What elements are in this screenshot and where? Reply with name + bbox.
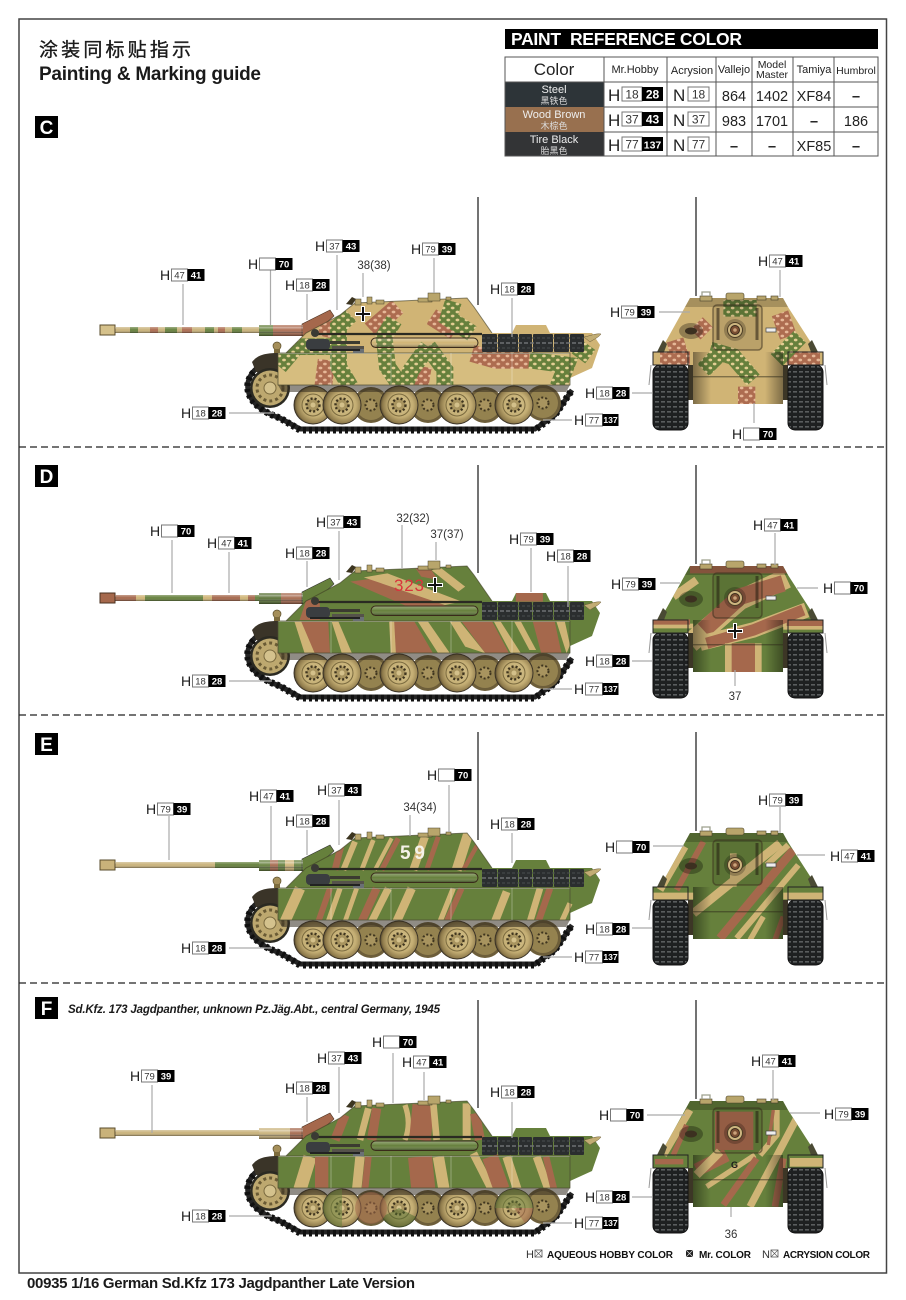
paint reference table: N xyxy=(673,136,685,155)
side view E xyxy=(100,732,605,965)
callout: H 47 41: H xyxy=(160,267,170,283)
callout: H 70: 70 xyxy=(403,1038,413,1048)
callout: H 79 39: 79 xyxy=(160,804,171,816)
callout: H 18 28 wheel: 28 xyxy=(212,944,222,954)
callout: front H 70 xyxy=(732,426,776,442)
callout: H 37 43 xyxy=(316,514,360,530)
paint reference table: 77 xyxy=(692,138,705,152)
legend: Mr. COLOR xyxy=(699,1250,752,1261)
callout: front H 70: 70 xyxy=(854,584,864,594)
paint reference heading xyxy=(505,29,878,49)
callout: front H 47 41 xyxy=(758,253,802,269)
callout: H 18 28 xyxy=(285,545,330,561)
paint reference table: – xyxy=(810,114,818,130)
callout: H 79 39: H xyxy=(146,801,156,817)
callout: H 79 39: 39 xyxy=(442,244,452,256)
callout: H 79 39 xyxy=(411,241,456,257)
side view F xyxy=(100,1000,605,1233)
callout: H 79 39 xyxy=(509,531,554,547)
callout: H 18 28 rear xyxy=(490,281,534,297)
title: chinese: 涂装同标贴指示 xyxy=(39,39,191,61)
callout: H 47 41 xyxy=(207,535,252,551)
callout: H 37 43: H xyxy=(315,238,325,254)
callout: H 18 28 wheel: 28 xyxy=(212,408,222,420)
callout: front H 79 39: 39 xyxy=(642,580,652,590)
callout: H 18 28 xyxy=(285,277,330,293)
callout: H 70 xyxy=(372,1034,416,1050)
paint reference table: Steel xyxy=(541,84,567,96)
front view C xyxy=(649,197,827,430)
callout: H 70: 70 xyxy=(279,260,289,270)
callout: front H 79 39: 79 xyxy=(625,580,636,590)
callout: H 47 41 xyxy=(249,788,294,804)
callout: front H 47 41: H xyxy=(830,848,840,864)
callout: H 77 137: 137 xyxy=(603,1218,618,1228)
callout: H 79 39: H xyxy=(411,241,421,257)
badge D xyxy=(35,465,58,488)
callout: 34(34): 34(34) xyxy=(403,802,437,814)
callout: front H 70: 70 xyxy=(636,842,646,854)
callout: H 79 39 xyxy=(146,801,190,817)
paint reference table: – xyxy=(852,139,860,155)
callout: H 77 137: 137 xyxy=(603,952,618,962)
callout: H 37 43: 37 xyxy=(331,1054,342,1064)
callout: front H 18 28: 28 xyxy=(616,1192,626,1204)
paint reference table: H xyxy=(608,136,620,155)
paint reference table xyxy=(505,57,878,156)
callout: H 77 137 xyxy=(574,1215,618,1231)
paint reference table: 1701 xyxy=(756,114,788,130)
title: english: Painting & Marking guide xyxy=(39,64,261,85)
callout: H 18 28 rear: 28 xyxy=(577,552,587,562)
callout: H 18 28 wheel: H xyxy=(181,405,191,421)
badge F: F xyxy=(41,999,52,1020)
callout: H 18 28 rear: 18 xyxy=(560,552,571,562)
paint reference table: 43 xyxy=(646,112,659,126)
callout: front H 70 xyxy=(599,1107,644,1123)
callout: H 77 137: H xyxy=(574,949,584,965)
callout: H 18 28 rear: 18 xyxy=(504,820,515,830)
callout: front H 18 28 xyxy=(585,1189,630,1205)
callout: H 47 41: 47 xyxy=(221,538,232,550)
callout: H 47 41: H xyxy=(249,788,259,804)
leader lines F xyxy=(152,1053,820,1223)
callout: H 18 28 rear: H xyxy=(490,281,500,297)
callout: front H 79 39 xyxy=(611,576,656,592)
paint reference table: Master xyxy=(756,69,789,81)
callout: H 70: 70 xyxy=(458,770,468,782)
callout: H 18 28 rear: 18 xyxy=(504,1088,515,1098)
callout: H 79 39: 79 xyxy=(523,534,534,546)
callout: H 37 43: 37 xyxy=(329,242,340,252)
callout: H 77 137 xyxy=(574,681,618,697)
callout: H 18 28 wheel: H xyxy=(181,940,191,956)
callout: front H 79 39: 79 xyxy=(624,308,635,318)
panel: scheme E xyxy=(35,732,874,965)
paint reference table: Color xyxy=(534,60,575,79)
callout: H 18 28 wheel: 18 xyxy=(195,408,206,420)
callout: H 18 28: H xyxy=(285,1080,295,1096)
callout: front H 18 28: 18 xyxy=(599,388,610,400)
front view F xyxy=(649,1000,827,1233)
callout: H 18 28: 28 xyxy=(316,1084,326,1094)
callout: H 79 39 xyxy=(130,1068,174,1084)
callout: front H 79 39 xyxy=(758,792,802,808)
marking: number 59: 59 xyxy=(400,843,425,864)
callout: H 18 28: 18 xyxy=(299,1084,310,1094)
callout: H 18 28 rear xyxy=(490,1084,534,1100)
callout: H 79 39: H xyxy=(130,1068,140,1084)
callout: H 37 43: 37 xyxy=(330,518,341,528)
callout: H 18 28 xyxy=(285,1080,330,1096)
legend: H xyxy=(526,1249,534,1261)
paint reference heading: PAINT REFERENCE COLOR xyxy=(511,29,742,49)
callout: H 77 137 xyxy=(574,949,618,965)
callout: front H 18 28: 18 xyxy=(599,656,610,668)
panel: scheme D xyxy=(35,465,868,703)
side view D xyxy=(100,465,605,698)
callout: H 79 39: 39 xyxy=(177,804,187,816)
legend: ACRYSION COLOR xyxy=(783,1250,871,1261)
legend xyxy=(526,1249,871,1261)
callout: H 18 28 rear xyxy=(490,816,534,832)
callout: H 18 28 rear: 28 xyxy=(521,1088,531,1098)
callout: H 47 41: H xyxy=(402,1054,412,1070)
callout: front H 79 39: 39 xyxy=(641,308,651,318)
side view C xyxy=(100,197,605,430)
callout: front H 79 39: H xyxy=(758,792,768,808)
badge C xyxy=(35,116,58,139)
callout: front H 79 39: 39 xyxy=(789,796,799,806)
callout: front H 79 39: H xyxy=(824,1106,834,1122)
paint reference table: Wood Brown xyxy=(523,109,585,121)
callout: H 47 41 xyxy=(160,267,204,283)
paint reference table: 186 xyxy=(844,114,868,130)
badge F xyxy=(35,997,58,1020)
callout: H 37 43: 43 xyxy=(347,518,357,528)
callout: front H 18 28: 28 xyxy=(616,656,626,668)
callout: front H 70 xyxy=(823,580,868,596)
leader lines C xyxy=(183,255,780,423)
callout: 37(37): 37(37) xyxy=(430,529,464,541)
paint reference table: – xyxy=(730,139,738,155)
callout: 32(32): 32(32) xyxy=(396,513,430,525)
callout: H 18 28: 18 xyxy=(299,816,310,828)
callout: H 18 28 rear: H xyxy=(490,816,500,832)
callout: front H 18 28: H xyxy=(585,921,595,937)
callout: H 18 28 wheel xyxy=(181,405,226,421)
callout: front H 70: H xyxy=(599,1107,609,1123)
callout: H 18 28: 28 xyxy=(316,548,326,560)
callout: H 79 39: 39 xyxy=(161,1072,171,1082)
callout: H 18 28 rear: H xyxy=(490,1084,500,1100)
marking: number 323: 323 xyxy=(394,576,424,595)
paint reference table: 137 xyxy=(644,139,661,151)
callout: H 47 41: 47 xyxy=(416,1058,427,1068)
callout: H 70 xyxy=(248,256,292,272)
callout: H 18 28: H xyxy=(285,277,295,293)
callout: H 18 28: 28 xyxy=(316,280,326,292)
front view E xyxy=(649,732,827,965)
callout: front H 79 39 xyxy=(824,1106,868,1122)
paint reference table: 983 xyxy=(722,114,746,130)
callout: H 70: H xyxy=(150,523,160,539)
paint reference table: N xyxy=(673,86,685,105)
callout: H 70: H xyxy=(427,767,437,783)
callout: H 18 28 wheel: 18 xyxy=(195,944,206,954)
callout: H 18 28: 18 xyxy=(299,548,310,560)
paint reference table: – xyxy=(852,89,860,105)
callout: H 77 137: 137 xyxy=(603,415,618,425)
paint reference table: 77 xyxy=(625,138,639,152)
callout: H 18 28: H xyxy=(285,813,295,829)
callout: front H 18 28 xyxy=(585,385,630,401)
callout: H 77 137: 77 xyxy=(589,1218,599,1230)
callout: H 79 39: 79 xyxy=(425,244,436,256)
callout: H 18 28 wheel: H xyxy=(181,1208,191,1224)
panel: scheme C xyxy=(35,116,827,442)
paint reference table: N xyxy=(673,111,685,130)
callout: H 77 137: 77 xyxy=(589,952,599,964)
callout: front H 47 41 xyxy=(751,1053,796,1069)
callout: H 47 41: 47 xyxy=(263,792,274,802)
paint reference table: Vallejo xyxy=(718,64,750,76)
callout: H 37 43 xyxy=(317,1050,362,1066)
legend: N xyxy=(762,1249,770,1261)
section dividers xyxy=(19,447,886,983)
callout: front H 79 39: H xyxy=(611,576,621,592)
legend: AQUEOUS HOBBY COLOR xyxy=(547,1250,674,1261)
paint reference table: 1402 xyxy=(756,89,788,105)
paint reference table: XF84 xyxy=(797,89,831,105)
callout: 38(38): 38(38) xyxy=(357,260,391,272)
callout: H 77 137 xyxy=(574,412,618,428)
callout: H 70 xyxy=(427,767,472,783)
paint reference table: 37 xyxy=(692,112,705,126)
callout: H 79 39: H xyxy=(509,531,519,547)
callout: front H 18 28: H xyxy=(585,385,595,401)
callout: H 77 137: H xyxy=(574,412,584,428)
paint reference table: 18 xyxy=(625,88,639,102)
scheme F caption: Sd.Kfz. 173 Jagdpanther, unknown Pz.Jäg.Abt., central Germany, 1945 xyxy=(68,1004,441,1016)
callout: H 18 28 wheel: 28 xyxy=(212,1212,222,1222)
callout: H 18 28 wheel: H xyxy=(181,673,191,689)
callout: front H 18 28: H xyxy=(585,1189,595,1205)
callout: H 18 28 wheel xyxy=(181,1208,226,1224)
callout: H 18 28 rear: 18 xyxy=(504,284,515,296)
callout: H 70: H xyxy=(372,1034,382,1050)
paint reference table: 28 xyxy=(646,88,659,102)
callout: front H 47 41: 47 xyxy=(765,1056,776,1068)
callout: H 77 137: H xyxy=(574,1215,584,1231)
paint reference table: Mr.Hobby xyxy=(611,64,659,76)
paint reference table: 864 xyxy=(722,89,746,105)
callout: front H 79 39: H xyxy=(610,304,620,320)
callout: front H 47 41: H xyxy=(751,1053,761,1069)
marking: front balkenkreuz xyxy=(727,623,743,639)
paint reference table: – xyxy=(768,139,776,155)
paint reference table: XF85 xyxy=(797,139,831,155)
callout: H 18 28 rear xyxy=(546,548,590,564)
paint reference table: 胎黑色 xyxy=(540,145,568,156)
callout: 36: 36 xyxy=(725,1229,737,1241)
callout: H 37 43: 37 xyxy=(331,786,342,796)
callout: H 70: H xyxy=(248,256,258,272)
callout: front H 47 41: 47 xyxy=(772,256,783,268)
paint reference table: H xyxy=(608,111,620,130)
callout: front H 79 39: 39 xyxy=(855,1110,865,1120)
callout: H 37 43: 43 xyxy=(348,1054,358,1064)
callout: front H 18 28: 28 xyxy=(616,924,626,936)
callout: H 37 43: 43 xyxy=(348,786,358,796)
paint reference table: Tire Black xyxy=(530,134,579,146)
callout: front H 47 41: H xyxy=(758,253,768,269)
paint reference table: 37 xyxy=(625,112,639,126)
callout: front H 18 28 xyxy=(585,653,630,669)
badge E xyxy=(35,733,58,756)
callout: front H 70: H xyxy=(605,839,615,855)
callout: front H 18 28: 18 xyxy=(599,924,610,936)
callout: front H 47 41: 47 xyxy=(844,852,855,862)
callout: front H 47 41: 47 xyxy=(767,520,778,532)
callout: front H 18 28: H xyxy=(585,653,595,669)
callout: front H 47 41: 41 xyxy=(861,852,872,862)
callout: front H 47 41 xyxy=(753,517,798,533)
callout: front H 47 41 xyxy=(830,848,874,864)
marking: front G: G xyxy=(731,1160,738,1170)
callout: front H 18 28: 18 xyxy=(599,1192,610,1204)
callout: front H 70: 70 xyxy=(630,1110,640,1122)
callout: H 77 137: H xyxy=(574,681,584,697)
paint reference table: 木棕色 xyxy=(540,120,568,131)
callout: H 77 137: 137 xyxy=(603,684,618,694)
leader lines E xyxy=(169,785,825,957)
marking: balkenkreuz xyxy=(355,306,371,322)
callout: front H 47 41: 41 xyxy=(784,520,795,532)
footer product title: 00935 1/16 German Sd.Kfz 173 Jagdpanther Late Version xyxy=(27,1275,415,1292)
callout: H 47 41: 41 xyxy=(238,538,249,550)
callout: H 47 41 xyxy=(402,1054,446,1070)
marking: balkenkreuz xyxy=(427,577,443,593)
callout: H 18 28 rear: H xyxy=(546,548,556,564)
callout: front H 70: H xyxy=(823,580,833,596)
callout: H 47 41: 47 xyxy=(174,270,185,282)
callout: front H 47 41: H xyxy=(753,517,763,533)
callout: front H 70: 70 xyxy=(763,430,773,440)
callout: front H 18 28 xyxy=(585,921,630,937)
paint reference table: Model xyxy=(758,59,786,71)
badge E: E xyxy=(40,735,53,756)
callout: H 18 28 wheel xyxy=(181,673,226,689)
paint reference table: Tamiya xyxy=(797,64,832,76)
callout: H 37 43: H xyxy=(317,1050,327,1066)
callout: H 18 28 rear: 28 xyxy=(521,284,531,296)
paint reference table: 黑铁色 xyxy=(540,95,568,106)
callout: front H 47 41: 41 xyxy=(789,256,800,268)
callout: H 18 28 rear: 28 xyxy=(521,820,531,830)
panel: scheme F xyxy=(35,997,868,1241)
callout: H 18 28: 18 xyxy=(299,280,310,292)
callout: H 47 41: 41 xyxy=(280,792,291,802)
callout: front H 79 39 xyxy=(610,304,654,320)
callout: H 18 28: 28 xyxy=(316,816,326,828)
callout: H 70: 70 xyxy=(181,526,191,538)
callout: H 18 28 wheel: 28 xyxy=(212,676,222,688)
paint reference table: 18 xyxy=(692,88,705,102)
callout: H 70 xyxy=(150,523,194,539)
callout: 37: 37 xyxy=(729,691,741,703)
paint reference table: H xyxy=(608,86,620,105)
callout: H 18 28 wheel: 18 xyxy=(195,1212,206,1222)
callout: H 47 41: 41 xyxy=(433,1058,444,1068)
callout: H 37 43: H xyxy=(317,782,327,798)
callout: front H 70: H xyxy=(732,426,742,442)
callout: H 37 43 xyxy=(317,782,362,798)
callout: H 37 43 xyxy=(315,238,360,254)
callout: H 18 28 wheel: 18 xyxy=(195,676,206,688)
callout: H 18 28: H xyxy=(285,545,295,561)
callout: H 79 39: 39 xyxy=(540,534,550,546)
leader lines D xyxy=(172,525,818,689)
callout: front H 79 39: 79 xyxy=(838,1110,849,1120)
callout: H 18 28 xyxy=(285,813,330,829)
callout: H 77 137: 77 xyxy=(589,684,599,696)
badge D: D xyxy=(40,467,53,488)
callout: H 79 39: 79 xyxy=(144,1072,155,1082)
callout: front H 70 xyxy=(605,839,650,855)
callout: front H 47 41: 41 xyxy=(782,1056,793,1068)
front view D xyxy=(649,465,827,698)
callout: H 77 137: 77 xyxy=(589,416,599,426)
callout: H 37 43: 43 xyxy=(346,242,356,252)
callout: front H 18 28: 28 xyxy=(616,388,626,400)
callout: front H 79 39: 79 xyxy=(772,796,783,806)
badge C: C xyxy=(40,118,54,139)
callout: H 18 28 wheel xyxy=(181,940,226,956)
callout: H 47 41: H xyxy=(207,535,217,551)
callout: H 37 43: H xyxy=(316,514,326,530)
callout: H 47 41: 41 xyxy=(191,270,202,282)
paint reference table: Acrysion xyxy=(671,65,713,77)
paint reference table: Humbrol xyxy=(836,65,876,77)
